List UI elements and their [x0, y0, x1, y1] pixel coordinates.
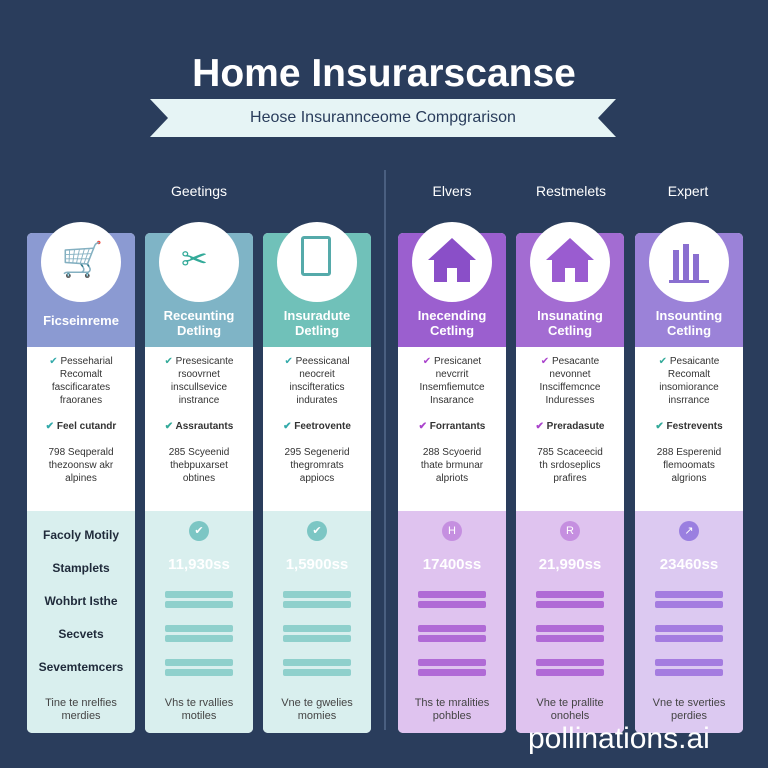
column 3: momies — [298, 710, 336, 722]
column 1: Stamplets — [52, 561, 110, 575]
column 3: Detling — [295, 323, 339, 338]
column 4: ✔ Forrantants — [419, 421, 485, 432]
column 5: onohels — [551, 710, 589, 722]
column 4: pohbles — [433, 710, 471, 722]
column 1: Ficseinreme — [43, 313, 119, 328]
column 2: Detling — [177, 323, 221, 338]
column 5: Cetling — [548, 323, 592, 338]
column 5: R — [566, 525, 574, 537]
column 1: fascificarates — [52, 382, 110, 393]
column 2: motiles — [182, 710, 216, 722]
column 2: 11,930ss — [168, 556, 230, 573]
column 3: indurates — [296, 395, 338, 406]
title: Home Insurarscanse — [192, 52, 576, 95]
column 2: Receunting — [164, 308, 234, 323]
column 1: Recomalt — [60, 369, 102, 380]
column 3: 1,5900ss — [286, 556, 348, 573]
column 1: ✔ Feel cutandr — [46, 421, 116, 432]
column 4: alpriots — [436, 473, 468, 484]
column 3: appiocs — [300, 473, 334, 484]
column 5: ✔ Preradasute — [536, 421, 604, 432]
text: Restmelets — [536, 183, 606, 199]
column 6: ✔ Festrevents — [655, 421, 723, 432]
column 1: Secvets — [58, 627, 104, 641]
column 6: algrions — [671, 473, 707, 484]
column 3: ✔ Feetrovente — [283, 421, 351, 432]
column 1: Tine te nrelfies — [45, 697, 117, 709]
column 6: Insounting — [656, 308, 722, 323]
column 1 icon: 🛒 — [61, 241, 103, 279]
column 1: merdies — [61, 710, 101, 722]
subtitle ribbon — [150, 99, 616, 137]
column 3 icon — [277, 222, 357, 302]
column 6: insrrance — [668, 395, 710, 406]
column 1: ✔ Pesseharial — [49, 356, 113, 367]
column 5: 21,990ss — [539, 556, 601, 573]
column 4 icon — [412, 222, 492, 302]
column 4 — [398, 233, 506, 733]
column 3: Insuradute — [284, 308, 350, 323]
column 2: ✔ Presesicante — [164, 356, 233, 367]
column 3: thegromrats — [290, 460, 344, 471]
column 5 — [516, 233, 624, 733]
column 3: 295 Sеgenerid — [284, 447, 350, 458]
column 6: flemoomats — [663, 460, 715, 471]
column 2: instrance — [179, 395, 219, 406]
column 2: Vhs te rvallies — [165, 697, 233, 709]
column 4: H — [448, 525, 456, 537]
column 4: 17400ss — [423, 556, 481, 573]
column 5: 785 Scaceecid — [537, 447, 603, 458]
column 2: obtines — [183, 473, 215, 484]
column 6: Cetling — [667, 323, 711, 338]
column 6: Recomalt — [668, 369, 710, 380]
column 2: thebpuxarset — [170, 460, 228, 471]
column 4: thate brmunar — [421, 460, 483, 471]
text: Expert — [668, 183, 708, 199]
column 4: Cetling — [430, 323, 474, 338]
column 2 icon — [159, 222, 239, 302]
column 1: 798 Sеqрerald — [48, 447, 114, 458]
column 1: thezoonsw akr — [49, 460, 113, 471]
column 4: 288 Sсyoerid — [423, 447, 481, 458]
column 4: Inecending — [418, 308, 486, 323]
column 1 icon — [41, 222, 121, 302]
column 2 — [145, 233, 253, 733]
column 5: Induresses — [546, 395, 594, 406]
subtitle ribbon: Hеose Insurannceome Comрgrarison — [250, 109, 516, 126]
column 4: Insarance — [430, 395, 474, 406]
column 6 — [635, 233, 743, 733]
column 2: ✔ Assrautants — [165, 421, 233, 432]
column 2: inscullsevice — [171, 382, 227, 393]
column 1: Sevemtemcers — [39, 660, 123, 674]
column 2: 285 Sсуeenid — [169, 447, 229, 458]
column 3: neocreit — [299, 369, 335, 380]
column 5 icon — [530, 222, 610, 302]
column 4: Ths te mralities — [415, 697, 489, 709]
column 4: ✔ Presicanet — [423, 356, 481, 367]
column 1: Facoly Motily — [43, 528, 119, 542]
column 2: rsoovrnet — [178, 369, 220, 380]
column 5: prafires — [553, 473, 587, 484]
column 4: Insemfiemutce — [419, 382, 485, 393]
column 6 icon — [649, 222, 729, 302]
column 3: inscifteratics — [289, 382, 344, 393]
column 6: 23460ss — [660, 556, 718, 573]
column 1: Wohbrt Isthe — [44, 594, 118, 608]
column 2 icon: ✂ — [181, 241, 208, 277]
column 2: ✔ — [194, 525, 204, 537]
column 5: nevonnet — [549, 369, 591, 380]
column 3: ✔ Peessicanal — [284, 356, 350, 367]
column 6: 288 Esperenid — [657, 447, 721, 458]
text: Elvers — [433, 183, 471, 199]
column 1: alpines — [65, 473, 97, 484]
column 4: nevcrrit — [436, 369, 468, 380]
column 6: perdies — [671, 710, 707, 722]
column 6: Vne te sverties — [653, 697, 725, 709]
column 5: ✔ Pesacante — [541, 356, 599, 367]
group labels: Geetings — [171, 183, 227, 199]
column 5: Vhe te prallite — [536, 697, 604, 709]
column 1 — [27, 233, 135, 733]
column 5: Insunating — [537, 308, 603, 323]
column 5: th srdoseplics — [539, 460, 601, 471]
column 1: fraoranes — [60, 395, 102, 406]
column 6: ✔ Pesaicante — [659, 356, 719, 367]
column 3 — [263, 233, 371, 733]
column 6: insomiorance — [659, 382, 719, 393]
column 3: ✔ — [312, 525, 322, 537]
column 5: Insciffemcnce — [540, 382, 600, 393]
column 3: Vne te gwelies — [281, 697, 353, 709]
watermark: pollinations.ai — [528, 722, 710, 755]
column 6: ↗ — [684, 525, 694, 537]
divider — [384, 170, 386, 730]
